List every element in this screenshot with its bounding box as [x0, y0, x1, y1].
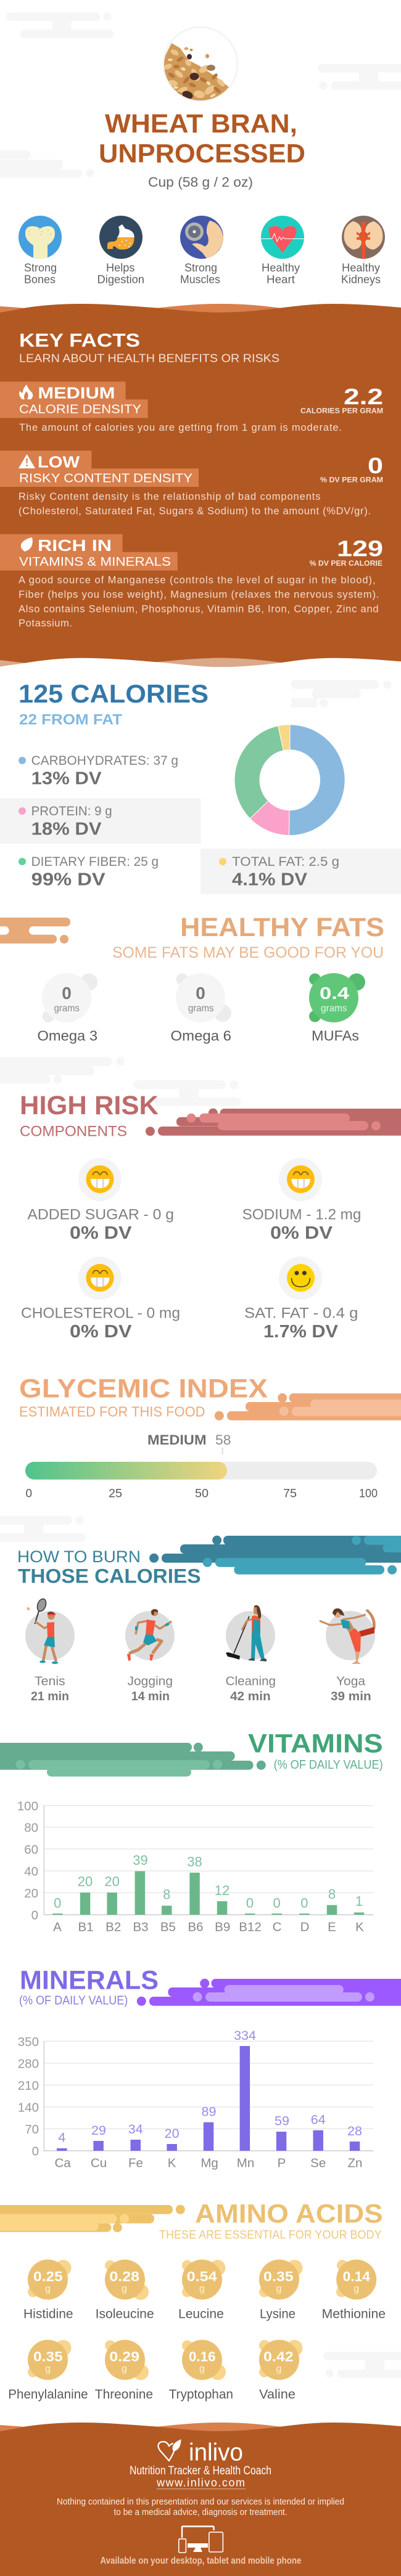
fact: risky content density: 0	[368, 453, 383, 478]
burn calories heading	[17, 1547, 201, 1587]
bar chart: minerals: 29	[91, 2123, 106, 2138]
fact: risky content density: Risky Content density is the relationship of bad components	[19, 491, 321, 502]
logo: inlivo	[158, 2439, 243, 2466]
bar chart: vitamins: 0	[54, 1896, 61, 1911]
burn calories deco	[149, 1536, 401, 1575]
fact: rich in vitamins and minerals: 129	[337, 536, 383, 561]
tagline and website: www.inlivo.com	[156, 2477, 245, 2489]
fact: rich in vitamins and minerals: Potassium.	[19, 618, 72, 629]
healthy fats deco	[0, 918, 70, 944]
tagline and website	[130, 2464, 271, 2489]
vitamins heading: (% OF DAILY VALUE)	[274, 1758, 383, 1772]
activity: yoga: Yoga	[336, 1674, 366, 1688]
risk: cholesterol	[21, 1257, 180, 1342]
activity: cleaning: 42 min	[230, 1690, 271, 1703]
bar chart: minerals: 34	[128, 2122, 143, 2137]
amino: leucine: g	[199, 2283, 205, 2294]
benefit: healthy kidneys	[341, 216, 385, 285]
omega 3: grams	[54, 1003, 80, 1014]
glycemic index heading: ESTIMATED FOR THIS FOOD	[19, 1403, 205, 1419]
glycemic index heading: GLYCEMIC INDEX	[19, 1374, 268, 1403]
amino: threonine: Threonine	[95, 2387, 153, 2402]
healthy fats heading: HEALTHY FATS	[180, 913, 384, 942]
bar chart: vitamins: 40	[24, 1865, 38, 1879]
risk: sodium: 0% DV	[270, 1223, 333, 1243]
bar chart: vitamins: B1	[78, 1920, 94, 1934]
bar chart: minerals: 28	[347, 2124, 362, 2138]
bar chart: vitamins: 60	[24, 1843, 38, 1857]
glycemic gauge: 58	[215, 1432, 231, 1448]
legend: dietary fiber	[19, 855, 159, 889]
bar chart: minerals: Fe	[128, 2156, 143, 2170]
key facts heading: KEY FACTS	[19, 330, 140, 351]
glycemic gauge: 25	[109, 1486, 122, 1500]
bar chart: minerals: 140	[18, 2101, 39, 2115]
mufas	[309, 973, 365, 1043]
omega 6: 0	[196, 984, 205, 1003]
fact: risky content density: % DV PER GRAM	[320, 476, 383, 484]
risk: saturated fat	[244, 1257, 358, 1342]
activity: cleaning: Cleaning	[226, 1674, 276, 1688]
fact: rich in vitamins and minerals: Fiber (helps you lose weight), Magnesium (relaxes the nervous system).	[19, 589, 379, 600]
bar chart: vitamins: 39	[133, 1853, 148, 1868]
calories heading: 22 FROM FAT	[19, 712, 122, 728]
glycemic gauge: MEDIUM	[147, 1432, 207, 1448]
high risk heading: COMPONENTS	[20, 1123, 127, 1139]
burn calories heading: THOSE CALORIES	[18, 1565, 201, 1587]
amino: methionine: Methionine	[322, 2307, 386, 2321]
donut chart: macronutrients	[234, 725, 345, 836]
fact: rich in vitamins and minerals: VITAMINS & MINERALS	[19, 555, 171, 569]
fact: calorie density: CALORIES PER GRAM	[300, 407, 383, 415]
burn calories heading: HOW TO BURN	[17, 1547, 141, 1566]
serving size: Cup (58 g / 2 oz)	[148, 174, 253, 190]
risk: cholesterol: 0% DV	[70, 1322, 132, 1342]
bar chart: minerals: K	[168, 2156, 176, 2170]
high risk heading: HIGH RISK	[20, 1091, 159, 1120]
bar chart: vitamins: B3	[133, 1920, 149, 1934]
amino: valine: 0.42	[263, 2349, 294, 2365]
vitamins heading: VITAMINS	[248, 1729, 383, 1758]
activity: jogging	[125, 1609, 175, 1703]
benefit: strong bones	[19, 216, 62, 285]
risk: saturated fat: 1.7% DV	[263, 1322, 339, 1342]
bar chart: minerals: 280	[18, 2057, 39, 2071]
amino: isoleucine: 0.28	[109, 2269, 139, 2285]
amino: lysine: 0.35	[263, 2269, 294, 2285]
icon: devices	[179, 2527, 223, 2553]
risk: sodium: SODIUM - 1.2 mg	[242, 1206, 361, 1223]
bar chart: vitamins: 0	[273, 1896, 281, 1911]
bar chart: vitamins: A	[53, 1920, 62, 1934]
risk: saturated fat: SAT. FAT - 0.4 g	[244, 1305, 358, 1321]
disclaimer	[57, 2497, 344, 2517]
benefit: strong bones: Strong	[24, 262, 57, 274]
activity: cleaning	[226, 1605, 276, 1703]
benefit: helps digestion: Digestion	[97, 273, 144, 285]
fact: rich in vitamins and minerals	[0, 534, 383, 629]
logo: inlivo: inlivo	[189, 2439, 243, 2466]
fact: calorie density	[0, 381, 383, 433]
amino: histidine	[23, 2259, 73, 2321]
amino: tryptophan: 0.16	[189, 2349, 216, 2365]
glycemic gauge: 100	[359, 1486, 378, 1500]
legend: dietary fiber: DIETARY FIBER: 25 g	[31, 855, 159, 869]
bar chart: vitamins: B6	[188, 1920, 204, 1934]
amino: histidine: g	[45, 2283, 51, 2294]
bar chart: vitamins: 100	[17, 1799, 38, 1813]
risk: added sugar	[27, 1158, 174, 1243]
bar chart: minerals: Mn	[237, 2156, 254, 2170]
mufas: grams	[321, 1003, 347, 1014]
amino: tryptophan: g	[199, 2363, 205, 2374]
legend: total fat: 4.1% DV	[232, 870, 308, 889]
amino: lysine: g	[276, 2283, 281, 2294]
legend: carbohydrates: CARBOHYDRATES: 37 g	[31, 754, 178, 768]
amino: threonine: 0.29	[109, 2349, 139, 2365]
mufas: 0.4	[320, 984, 350, 1003]
amino: leucine	[178, 2259, 226, 2321]
benefit: strong muscles: Muscles	[180, 273, 220, 285]
fact: calorie density: MEDIUM	[38, 385, 115, 402]
key facts heading: LEARN ABOUT HEALTH BENEFITS OR RISKS	[19, 351, 279, 364]
fact: rich in vitamins and minerals: RICH IN	[38, 537, 112, 555]
amino: lysine: Lysine	[260, 2307, 296, 2321]
omega 3: Omega 3	[37, 1027, 97, 1043]
amino: threonine	[95, 2340, 153, 2402]
amino: methionine	[322, 2259, 386, 2321]
activity: jogging: 14 min	[131, 1690, 170, 1703]
fact: risky content density: RISKY CONTENT DENSITY	[19, 471, 192, 486]
bar chart: vitamins: 38	[187, 1854, 202, 1869]
disclaimer: Nothing contained in this presentation and our services is intended or implied	[57, 2497, 344, 2507]
legend: total fat	[200, 849, 401, 894]
legend: carbohydrates	[19, 754, 178, 789]
omega 3	[37, 973, 97, 1043]
calories heading: 125 CALORIES	[19, 679, 209, 708]
risk: sodium	[242, 1158, 361, 1243]
bar chart: vitamins: 20	[24, 1886, 38, 1901]
bar chart: minerals: Ca	[54, 2156, 71, 2170]
glycemic index heading	[19, 1374, 268, 1419]
legend: total fat: TOTAL FAT: 2.5 g	[232, 855, 339, 869]
amino: isoleucine: g	[122, 2283, 127, 2294]
bar chart: vitamins: 8	[163, 1887, 170, 1902]
legend: protein: 18% DV	[31, 819, 102, 839]
minerals heading: (% OF DAILY VALUE)	[19, 1994, 128, 2007]
title: WHEAT BRAN,	[105, 109, 297, 139]
availability note: Available on your desktop, tablet and mobile phone	[100, 2556, 302, 2566]
bar chart: vitamins: 20	[78, 1874, 93, 1889]
legend: dietary fiber: 99% DV	[31, 870, 106, 889]
amino: valine: g	[276, 2363, 281, 2374]
legend: carbohydrates: 13% DV	[31, 769, 102, 789]
bar chart: vitamins	[17, 1799, 373, 1934]
amino: phenylalanine: g	[45, 2363, 51, 2374]
bar chart: minerals: 210	[18, 2079, 39, 2093]
glycemic gauge: 0	[26, 1486, 32, 1500]
bar chart: vitamins: B9	[215, 1920, 230, 1934]
benefit: healthy kidneys: Kidneys	[341, 273, 381, 285]
amino: leucine: 0.54	[187, 2269, 217, 2285]
bar chart: vitamins: 0	[31, 1908, 38, 1922]
bar chart: vitamins: 8	[328, 1886, 336, 1902]
healthy fats heading: SOME FATS MAY BE GOOD FOR YOU	[112, 944, 384, 961]
bar chart: vitamins: 20	[104, 1874, 120, 1889]
omega 6	[170, 973, 231, 1043]
amino: lysine	[259, 2259, 302, 2321]
bar chart: vitamins: E	[328, 1920, 336, 1934]
title: UNPROCESSED	[99, 139, 305, 169]
disclaimer: to be a medical advice, diagnosis or treatment.	[114, 2507, 287, 2517]
panel: footer	[0, 2423, 401, 2576]
activity: yoga: 39 min	[331, 1690, 371, 1703]
key facts heading	[19, 330, 279, 364]
amino acids heading	[159, 2199, 383, 2241]
fact: rich in vitamins and minerals: A good source of Manganese (controls the level of sugar in the blood),	[19, 575, 376, 586]
amino: histidine: 0.25	[33, 2269, 63, 2285]
fact: risky content density	[0, 450, 383, 516]
vitamins deco	[0, 1743, 266, 1777]
title	[99, 109, 305, 169]
bar chart: minerals: 59	[275, 2114, 289, 2129]
benefit: healthy kidneys: Healthy	[342, 262, 380, 274]
fact: risky content density: (Cholesterol, Saturated Fat, Sugars & Sodium) to the amount (%DV/gr).	[19, 505, 371, 516]
fact: calorie density: CALORIE DENSITY	[19, 402, 141, 417]
minerals deco	[137, 1979, 401, 2006]
amino: tryptophan	[169, 2340, 233, 2402]
bar chart: vitamins: C	[273, 1920, 282, 1934]
bar chart: minerals: Zn	[348, 2156, 362, 2170]
bar chart: minerals	[18, 2028, 373, 2170]
mufas: MUFAs	[312, 1027, 359, 1043]
bar chart: vitamins: B5	[160, 1920, 176, 1934]
glycemic deco	[215, 1393, 401, 1420]
benefit: healthy heart: Healthy	[262, 262, 300, 274]
omega 6: grams	[188, 1003, 213, 1014]
risk: cholesterol: CHOLESTEROL - 0 mg	[21, 1305, 180, 1321]
fact: calorie density: The amount of calories you are getting from 1 gram is moderate.	[19, 422, 342, 433]
benefit: healthy heart	[261, 216, 304, 285]
amino: phenylalanine: 0.35	[33, 2349, 63, 2365]
panel: key facts	[0, 304, 401, 667]
fact: rich in vitamins and minerals: % DV PER CALORIE	[310, 560, 382, 568]
benefit: helps digestion	[97, 216, 144, 285]
bar chart: vitamins: K	[355, 1920, 364, 1934]
amino: histidine: Histidine	[23, 2307, 73, 2321]
benefit: healthy heart: Heart	[267, 273, 295, 285]
tagline and website: Nutrition Tracker & Health Coach	[130, 2464, 271, 2477]
bar chart: minerals: P	[278, 2156, 286, 2170]
amino: isoleucine	[96, 2259, 154, 2321]
amino: methionine: g	[353, 2283, 359, 2294]
bar chart: vitamins: 0	[300, 1896, 308, 1911]
glycemic gauge: 75	[283, 1486, 297, 1500]
bar chart: minerals: 4	[58, 2130, 65, 2145]
bar chart: minerals: 89	[202, 2105, 216, 2119]
fact: calorie density: 2.2	[344, 384, 383, 409]
vitamins heading	[248, 1729, 383, 1772]
bar chart: vitamins: 0	[246, 1896, 254, 1911]
amino: valine	[259, 2340, 302, 2402]
risk: added sugar: ADDED SUGAR - 0 g	[27, 1206, 174, 1223]
amino: phenylalanine: Phenylalanine	[8, 2387, 88, 2402]
food image: granola in circle	[162, 27, 238, 106]
calories heading	[19, 679, 209, 728]
bar chart: vitamins: 1	[355, 1894, 363, 1909]
bar chart: minerals: 64	[311, 2113, 326, 2127]
amino: methionine: 0.14	[343, 2269, 371, 2285]
legend: protein	[0, 798, 201, 844]
high risk heading	[20, 1091, 159, 1139]
bar chart: minerals: 334	[234, 2028, 256, 2043]
risk: added sugar: 0% DV	[70, 1223, 132, 1243]
amino acids deco	[0, 2205, 185, 2232]
bar chart: minerals: Se	[310, 2156, 326, 2170]
bar chart: vitamins: 80	[24, 1821, 38, 1835]
benefit: strong bones: Bones	[24, 273, 56, 285]
bar chart: minerals: 20	[165, 2126, 180, 2141]
benefit: helps digestion: Helps	[106, 262, 134, 274]
bar chart: minerals: 0	[32, 2144, 39, 2158]
amino: threonine: g	[122, 2363, 127, 2374]
benefit: strong muscles: Strong	[184, 262, 217, 274]
amino: leucine: Leucine	[178, 2307, 224, 2321]
omega 6: Omega 6	[170, 1027, 231, 1043]
benefit: strong muscles	[180, 216, 223, 285]
amino: isoleucine: Isoleucine	[96, 2307, 154, 2321]
bar chart: minerals: 70	[25, 2122, 39, 2137]
bar chart: minerals: 350	[18, 2035, 39, 2049]
fact: rich in vitamins and minerals: Also contains Selenium, Phosphorus, Vitamin B6, Iron, Copper, Zinc and	[19, 603, 379, 614]
amino: phenylalanine	[8, 2340, 88, 2402]
glycemic gauge: 50	[195, 1486, 209, 1500]
fact: risky content density: LOW	[38, 454, 80, 471]
activity: yoga	[320, 1608, 376, 1703]
minerals heading: MINERALS	[20, 1965, 159, 1995]
bar chart: vitamins: B2	[105, 1920, 121, 1934]
bar chart: minerals: Cu	[91, 2156, 107, 2170]
amino acids heading: AMINO ACIDS	[195, 2199, 383, 2229]
amino acids heading: THESE ARE ESSENTIAL FOR YOUR BODY	[159, 2228, 382, 2241]
healthy fats heading	[112, 913, 384, 961]
glycemic gauge	[25, 1432, 378, 1500]
amino: tryptophan: Tryptophan	[169, 2387, 233, 2402]
bar chart: vitamins: 12	[215, 1883, 229, 1898]
activity: tennis	[25, 1597, 75, 1703]
bar chart: minerals: Mg	[200, 2156, 218, 2170]
activity: tennis: Tenis	[35, 1674, 65, 1688]
high risk deco	[146, 1108, 401, 1136]
bar chart: vitamins: B12	[239, 1920, 262, 1934]
activity: tennis: 21 min	[31, 1690, 69, 1703]
bar chart: vitamins: D	[300, 1920, 309, 1934]
legend: protein: PROTEIN: 9 g	[31, 804, 112, 818]
omega 3: 0	[62, 984, 72, 1003]
amino: valine: Valine	[259, 2387, 296, 2402]
activity: jogging: Jogging	[127, 1674, 173, 1688]
